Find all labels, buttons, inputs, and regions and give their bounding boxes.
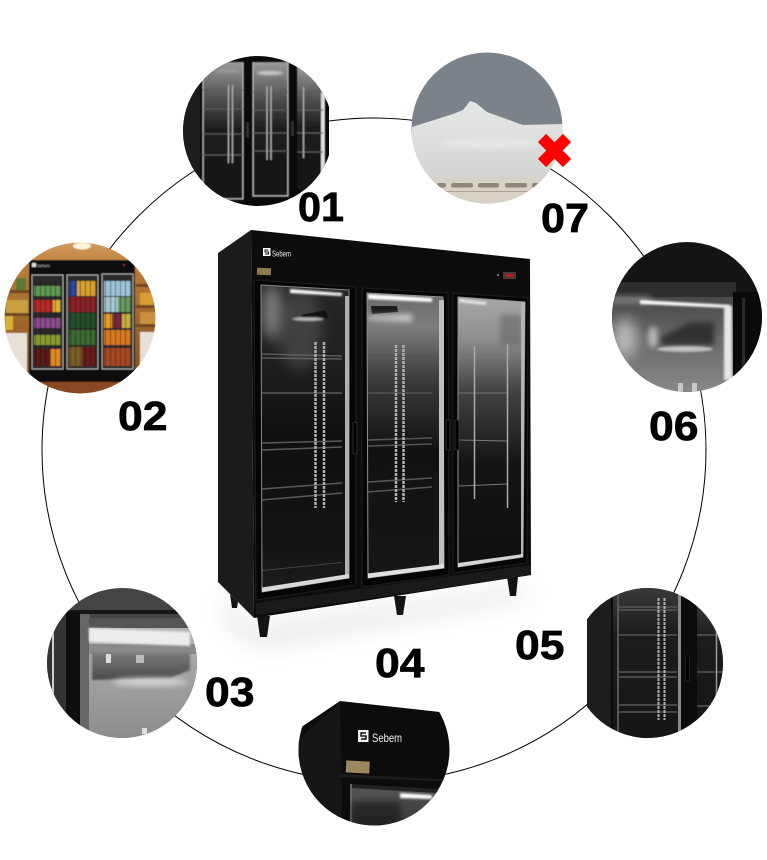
fan unit [660, 322, 714, 345]
shop fridge body [29, 260, 135, 382]
main refrigerator [218, 230, 531, 650]
detail circle 06: LED strip close-up [611, 241, 765, 395]
nameplate [257, 268, 271, 275]
drinks: middle door [69, 281, 96, 366]
handle [686, 656, 690, 681]
LED strip [89, 628, 190, 646]
icon: red cross [542, 138, 567, 163]
temperature display [497, 272, 516, 279]
cabinet front [251, 230, 531, 618]
shop fridge glass [32, 274, 133, 369]
detail circle 07: ice build-up [411, 52, 565, 210]
detail circle 04: logo close-up [298, 700, 455, 830]
detail circle 05: shelves close-up [587, 588, 723, 738]
door frame [47, 612, 68, 715]
connecting ring [42, 118, 706, 782]
number 01: 01 [298, 184, 344, 230]
door 2 [367, 293, 444, 578]
door handles [353, 420, 459, 454]
shelf racks [678, 383, 683, 392]
door 1 [261, 284, 349, 592]
detail circle 01: refrigerator doors [183, 56, 329, 206]
base plinth [256, 565, 531, 615]
floor shadow [222, 585, 530, 650]
LED strip [640, 300, 730, 308]
glass panel [611, 297, 733, 394]
bottle separators [34, 281, 131, 366]
number 03: 03 [205, 669, 254, 715]
number 02: 02 [118, 393, 168, 439]
cabinet side [218, 230, 254, 618]
door 3 [458, 297, 525, 567]
Sebem logo: Sebem [372, 731, 402, 745]
shop fridge logo: Sebem [37, 263, 50, 268]
detail circle 03: LED lighting close-up [46, 587, 199, 740]
door glass [352, 788, 438, 826]
nameplate [346, 760, 370, 774]
shop fridge logo [32, 263, 50, 268]
glass panel [89, 620, 199, 740]
Sebem logo [358, 730, 402, 742]
number 04: 04 [375, 640, 425, 686]
logo: Sebem: Sebem [272, 250, 291, 258]
drinks: right door [104, 281, 131, 366]
feet [230, 577, 518, 637]
vent strip [430, 177, 544, 204]
side shelves [4, 278, 158, 378]
logo: Sebem [263, 248, 291, 258]
detail circle 02: stocked refrigerator in a shop [4, 242, 158, 396]
fan unit [92, 653, 190, 680]
number 06: 06 [649, 403, 698, 449]
drinks: left door [34, 286, 61, 366]
door frames [254, 280, 528, 600]
number 07: 07 [541, 195, 589, 241]
door frame [733, 292, 762, 376]
frost mound [412, 101, 565, 210]
LED strip [400, 793, 432, 799]
number 05: 05 [515, 622, 564, 668]
